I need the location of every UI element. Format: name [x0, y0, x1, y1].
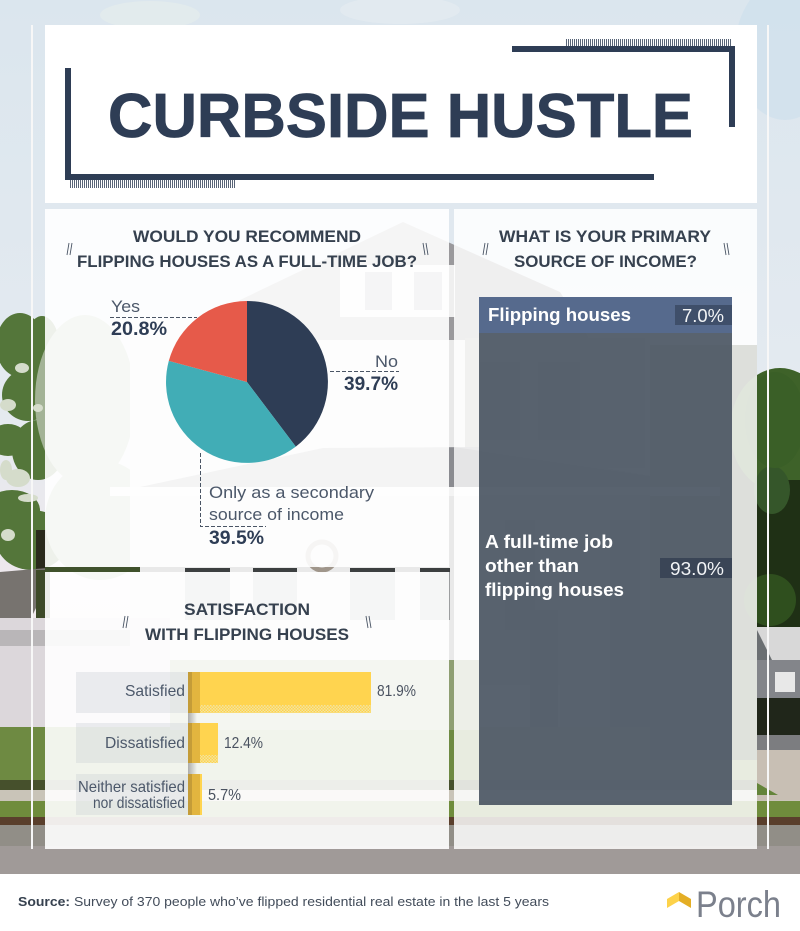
panel: recommend flipping [45, 209, 449, 567]
bar: satisfied: Satisfied [125, 683, 185, 700]
heading: recommend: FLIPPING HOUSES AS A FULL-TIME JOB? [77, 252, 417, 271]
bar: dissatisfied [76, 723, 263, 774]
bar: dissatisfied: Dissatisfied [105, 735, 185, 752]
panel: title [45, 25, 757, 203]
segment label: flipping houses: Flipping houses [488, 305, 631, 325]
label: secondary source [200, 453, 375, 549]
bar: neither: nor dissatisfied [93, 795, 185, 812]
lawn [0, 727, 757, 790]
bar: neither: Neither satisfied [78, 779, 185, 796]
value tag: 7.0%: 7.0% [682, 306, 724, 326]
sky gaps in left tree [0, 363, 43, 541]
right tree [640, 345, 800, 695]
bracket: top right [512, 49, 732, 127]
label: yes [110, 297, 197, 340]
upper storey siding and windows [465, 338, 645, 468]
value tag: 7.0% [675, 305, 732, 326]
heading: recommend: WOULD YOU RECOMMEND [133, 227, 361, 246]
bar: dissatisfied: 12.4% [224, 735, 263, 752]
label: no [330, 352, 399, 395]
porch roof [140, 447, 650, 496]
footer [0, 874, 800, 931]
heading: primary income [483, 227, 729, 271]
neighbour roof [0, 568, 47, 620]
heading: satisfaction [123, 600, 371, 644]
heading: satisfaction: SATISFACTION [184, 600, 310, 619]
panel: primary income [454, 209, 757, 849]
curb and road [0, 825, 800, 846]
house [130, 320, 650, 690]
heading: recommend [67, 227, 428, 271]
label: secondary source: source of income [209, 505, 344, 524]
segment label: full-time job [485, 532, 624, 600]
logo: Porch: Porch [696, 884, 781, 925]
hatch: bottom left [69, 180, 235, 188]
van and driveway at right [757, 627, 800, 687]
segment label: full-time job: A full-time job [485, 532, 613, 552]
heading: primary income: SOURCE OF INCOME? [514, 252, 697, 271]
panel: satisfaction [45, 572, 449, 849]
value tag: 93.0% [660, 558, 732, 579]
label: secondary source: Only as a secondary [209, 483, 375, 502]
bar: neither: 5.7% [208, 787, 241, 804]
bar: satisfied [76, 672, 416, 723]
heading: satisfaction: WITH FLIPPING HOUSES [145, 625, 349, 644]
bar: neither [76, 774, 241, 815]
hatch: top right [565, 39, 731, 46]
heading: primary income: WHAT IS YOUR PRIMARY [499, 227, 712, 246]
label: yes: Yes [111, 297, 140, 316]
lower storey windows [185, 568, 450, 620]
label: yes: 20.8% [111, 319, 167, 340]
gap between left panels: dark window tops and foliage [45, 567, 450, 572]
label: no: 39.7% [344, 374, 398, 395]
stacked bar: income [479, 297, 732, 805]
pie chart [166, 301, 328, 463]
segment label: full-time job: other than [485, 556, 579, 576]
label: secondary source: 39.5% [209, 528, 264, 549]
label: no: No [375, 352, 398, 371]
fence [0, 618, 170, 728]
bar: satisfied: 81.9% [377, 683, 416, 700]
source: Source: Survey of 370 people who’ve flipped residential real estate in the last 5 years [18, 894, 550, 909]
segment label: full-time job: flipping houses [485, 580, 624, 600]
value tag: 93.0%: 93.0% [670, 559, 724, 579]
logo: Porch [667, 884, 781, 925]
bracket: bottom left [68, 68, 654, 177]
title: CURBSIDE HUSTLE [108, 82, 693, 151]
porch [480, 495, 650, 685]
left tree [0, 313, 155, 580]
